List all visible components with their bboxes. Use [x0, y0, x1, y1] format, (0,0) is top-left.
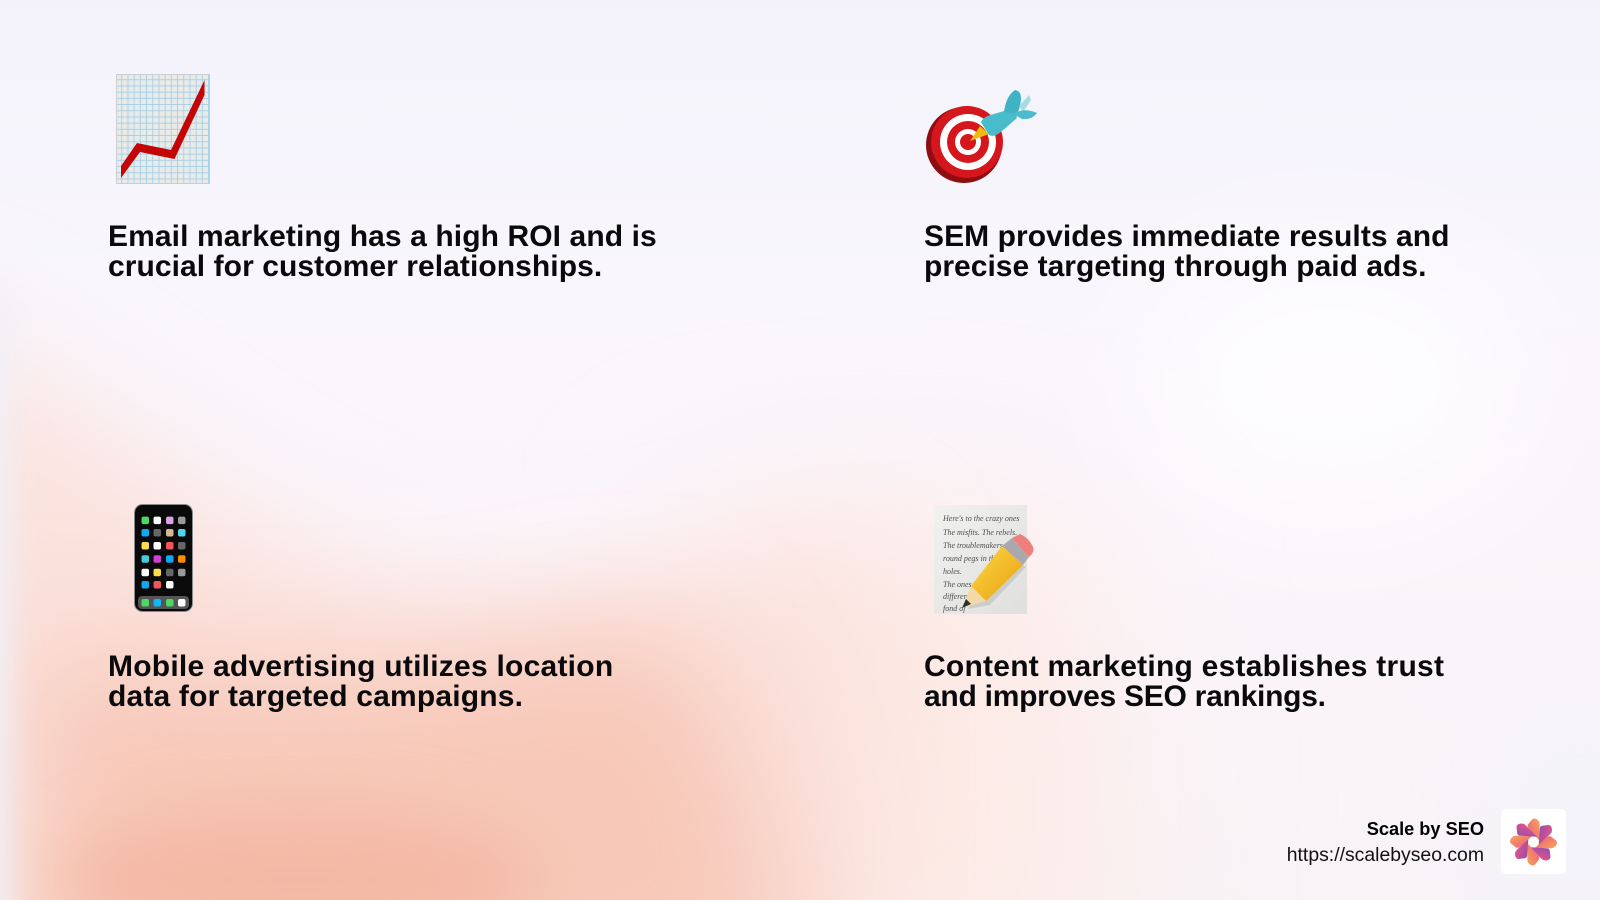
logo: pinwheel	[1501, 809, 1566, 874]
text: email marketing: Email marketing has a high ROI and is	[108, 220, 657, 253]
icon: memo and pencil: differently	[943, 592, 976, 601]
card: content marketing	[924, 505, 1444, 713]
icon: chart with upward trend	[116, 74, 210, 184]
brand footer	[1287, 809, 1566, 874]
text: email marketing	[108, 220, 657, 283]
text: content marketing: Content marketing establishes trust	[924, 650, 1444, 683]
brand url: https://scalebyseo.com	[1287, 844, 1484, 866]
text: search engine marketing: SEM provides immediate results and	[924, 220, 1450, 253]
text: mobile advertising	[108, 650, 613, 713]
icon: memo and pencil: The ones who see	[943, 580, 1000, 589]
icon: memo and pencil: Here's to the crazy ones	[942, 514, 1020, 523]
card: search engine marketing	[924, 90, 1450, 283]
icon: dart hitting target	[926, 90, 1037, 183]
text: mobile advertising: data for targeted campaigns.	[108, 680, 523, 713]
text: email marketing: crucial for customer relationships.	[108, 250, 602, 283]
icon: memo and pencil: The misfits. The rebels.	[943, 528, 1017, 537]
icon: memo and pencil	[934, 505, 1034, 614]
card: mobile advertising	[108, 504, 613, 713]
brand name: Scale by SEO	[1367, 819, 1484, 839]
text: search engine marketing	[924, 220, 1450, 283]
icon: memo and pencil: holes.	[943, 567, 962, 576]
icon: mobile phone	[134, 504, 193, 612]
text: search engine marketing: precise targeting through paid ads.	[924, 250, 1426, 283]
icon: memo and pencil: round pegs in the	[943, 554, 999, 563]
text: content marketing: and improves SEO rankings.	[924, 680, 1326, 713]
icon: memo and pencil: The troublemakers. The	[943, 541, 1019, 550]
card: email marketing	[108, 74, 657, 283]
text: mobile advertising: Mobile advertising utilizes location	[108, 650, 613, 683]
icon: memo and pencil: fond of	[943, 604, 967, 613]
text: content marketing	[924, 650, 1444, 713]
